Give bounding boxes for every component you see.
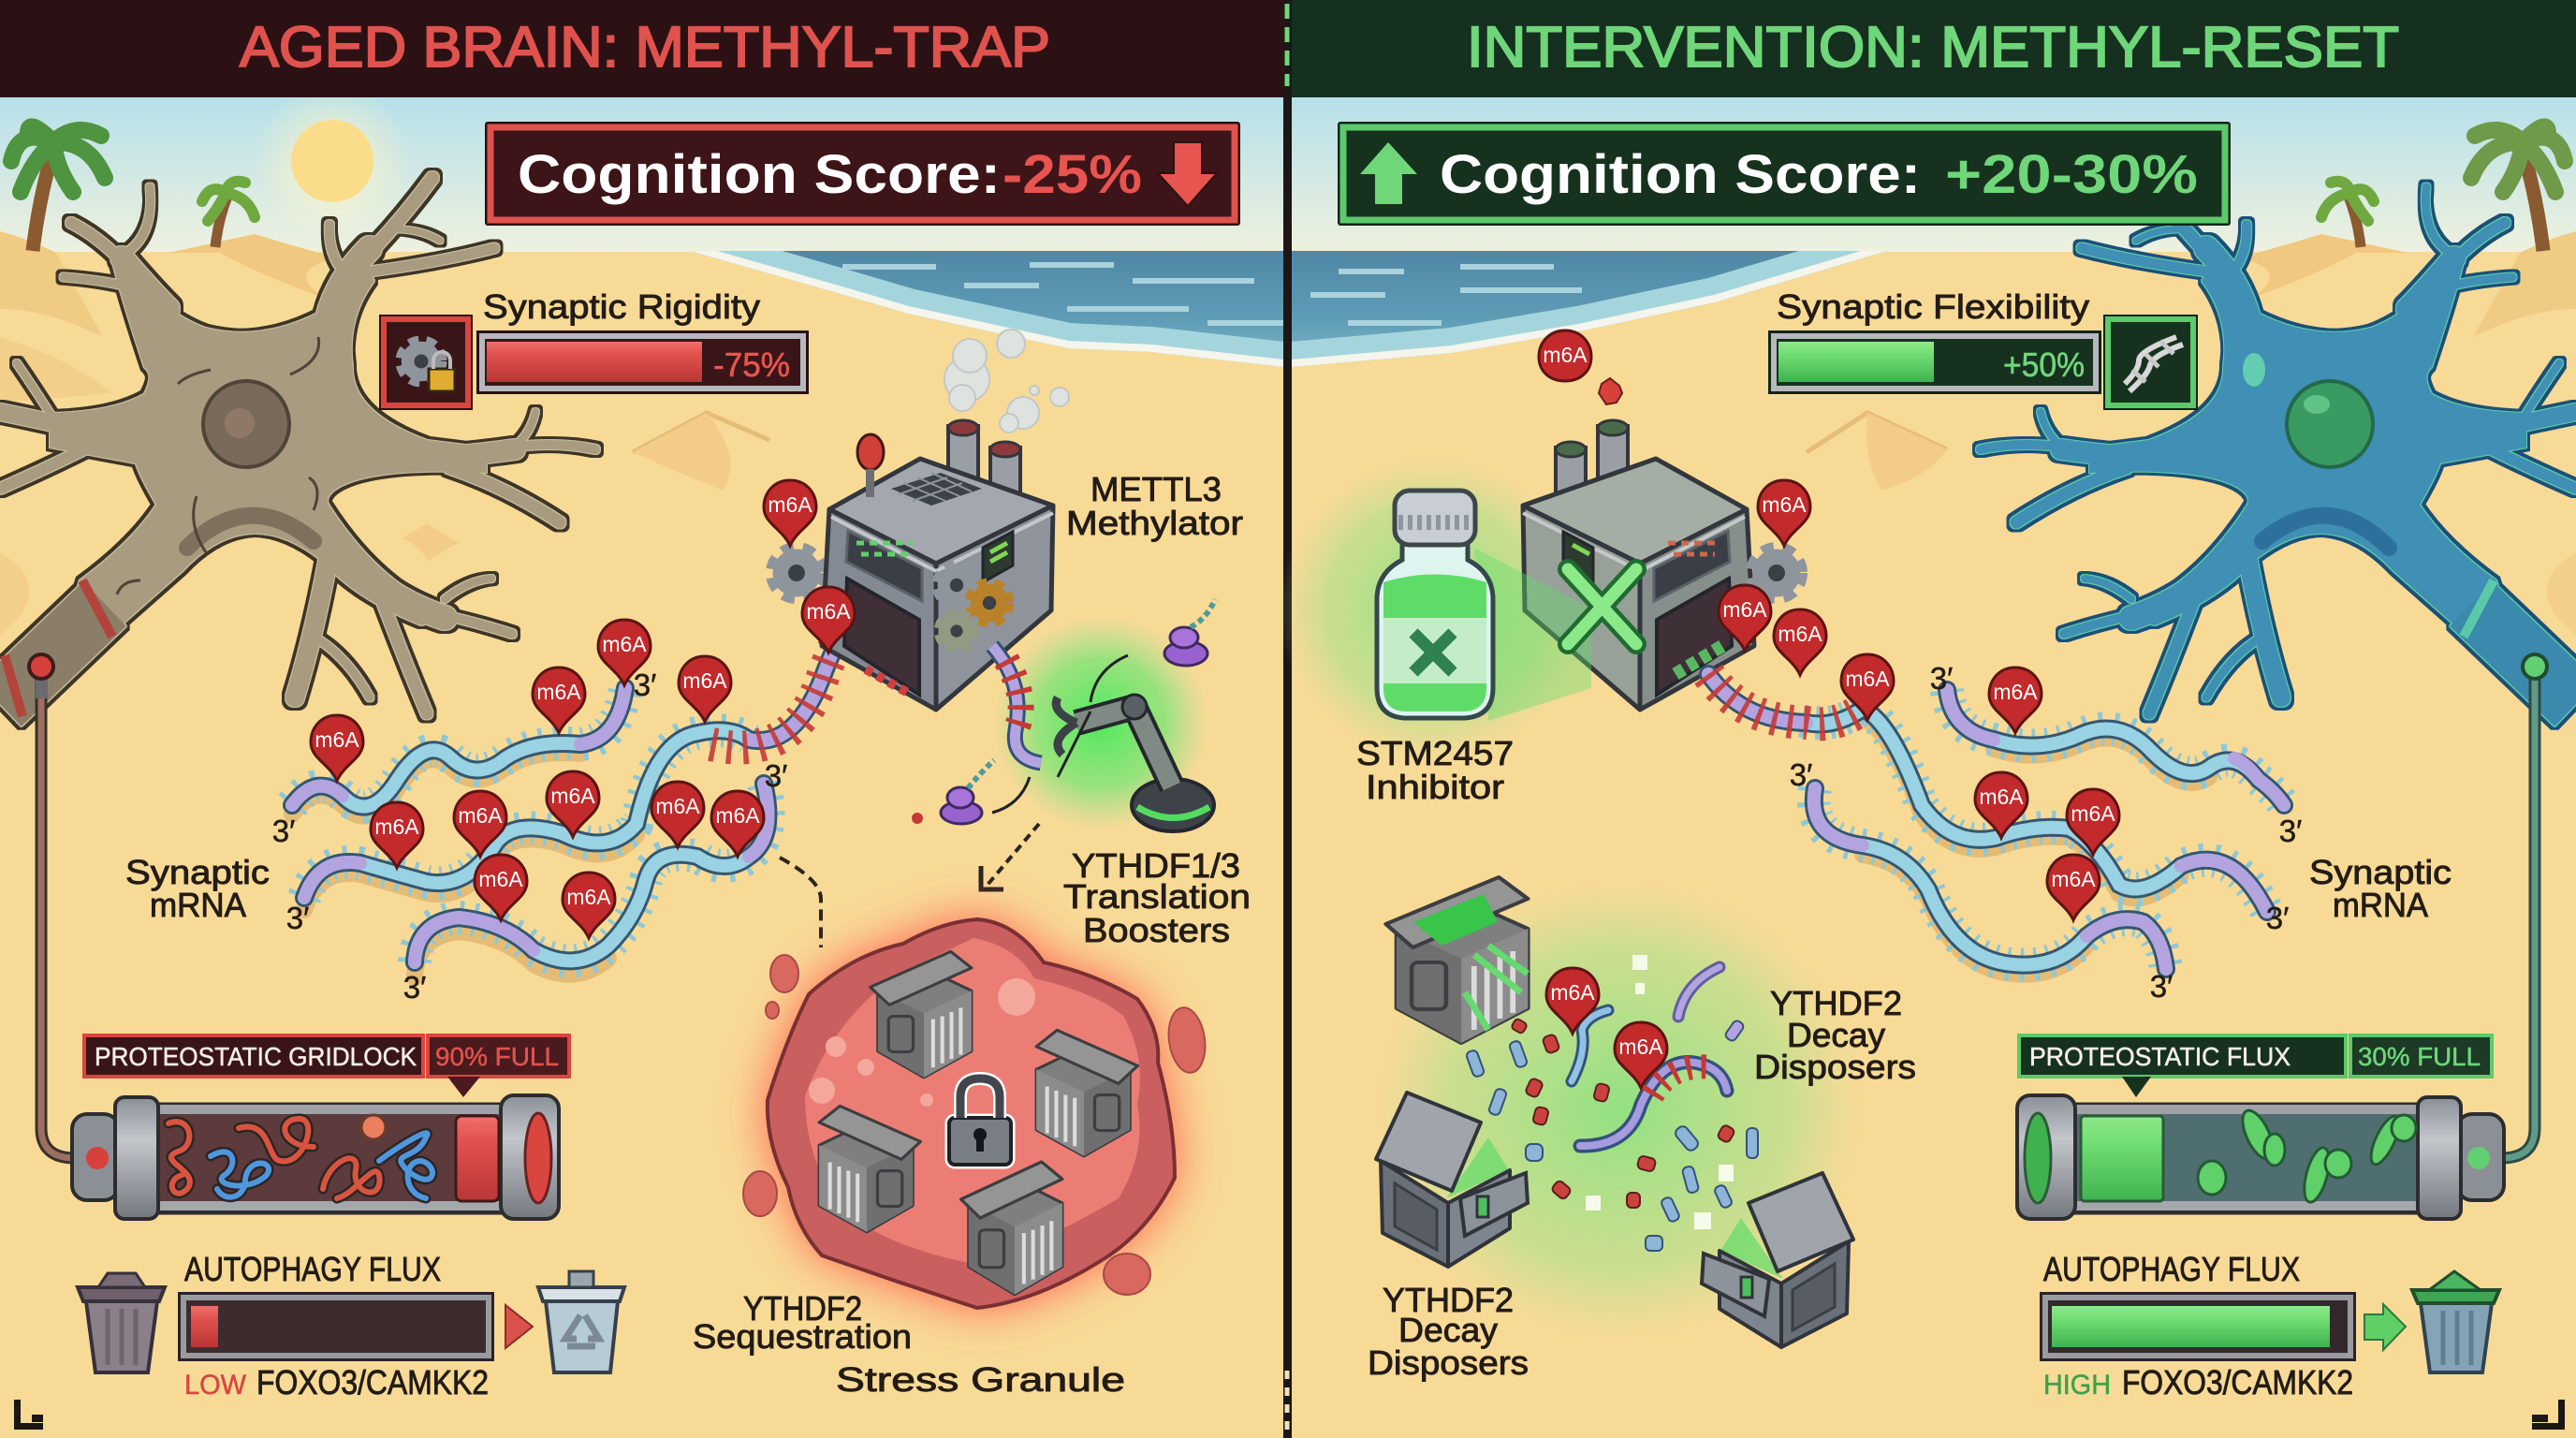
banner: cognition score down (485, 122, 1240, 226)
label: YTHDF1/3 translation boosters: YTHDF1/3 (1072, 846, 1240, 885)
orange ball (361, 1115, 386, 1139)
tube interior (2071, 1109, 2422, 1208)
green glow (993, 615, 1208, 830)
strand shadows (1863, 718, 2209, 975)
shredder: top decay unit (1385, 877, 1528, 1043)
m6A markers: left: m6A (315, 727, 359, 752)
proteostatic flux badge (2019, 1035, 2492, 1097)
status: high: HIGH (2043, 1370, 2111, 1401)
nozzle light (86, 1147, 109, 1169)
3-prime labels: right: 3′ (2266, 901, 2289, 935)
text: 30 percent full: 30% FULL (2358, 1042, 2481, 1071)
protein clumps (2198, 1107, 2416, 1205)
bar frame (1768, 330, 2101, 394)
factory: inhibited METTL3 (1523, 420, 1801, 710)
liquid (1383, 575, 1486, 712)
red pieces (1511, 1018, 1735, 1208)
bar fill (1778, 342, 1934, 382)
wire: axon to left capsule (29, 654, 75, 1158)
tangled aggregates (168, 1119, 432, 1198)
m6A markers: right: m6A (1979, 785, 2024, 809)
status lights (856, 543, 913, 554)
icon: down arrow (1158, 142, 1217, 206)
glass body (1377, 543, 1493, 718)
exit port (525, 1113, 551, 1203)
value: minus 25 percent: -25% (1003, 144, 1142, 205)
icon: active trash bin (2412, 1271, 2499, 1372)
shell (72, 1095, 559, 1219)
red alarm lamp (857, 434, 884, 470)
header: aged brain (0, 0, 1284, 97)
granule body (768, 919, 1175, 1308)
m6A markers: right: m6A (1762, 492, 1807, 517)
value: -75% (713, 345, 790, 384)
label: YTHDF1/3 translation boosters: Boosters (1083, 911, 1230, 949)
left beach scenery (0, 81, 1284, 637)
label: synaptic mRNA left: mRNA (150, 886, 246, 924)
label: YTHDF1/3 translation boosters (1063, 846, 1251, 949)
small arrows (992, 655, 1128, 813)
m6A markers: left: m6A (682, 668, 727, 693)
label: stress granule: Stress Granule (836, 1360, 1125, 1399)
bubbles (809, 978, 1035, 1107)
bar (2040, 1292, 2356, 1361)
m6A markers: left: m6A (458, 803, 503, 828)
neuron: healthy, flexible (1981, 178, 2576, 713)
icon: locked gear (379, 315, 473, 410)
autophagy flux: low (78, 1250, 624, 1401)
text: flux: PROTEOSTATIC FLUX (2029, 1042, 2291, 1071)
icon: palm trees right (2321, 126, 2565, 251)
icon: big inhibition X (1568, 569, 1636, 644)
m6A markers: right: m6A (1722, 597, 1767, 622)
m6A markers: left: m6A (602, 632, 647, 656)
green base panel (1676, 646, 1722, 674)
bar fill (191, 1306, 218, 1347)
label: YTHDF2 sequestration (693, 1289, 912, 1356)
3-prime labels: right: 3′ (1790, 757, 1812, 792)
banner: cognition score up (1338, 122, 2231, 226)
3-prime labels: left (272, 668, 787, 1005)
label: YTHDF2 decay disposers upper (1754, 984, 1916, 1086)
status: low: LOW (184, 1370, 247, 1401)
text: cognition score: Cognition Score: (518, 144, 1001, 205)
text: cognition score: Cognition Score: (1440, 144, 1921, 205)
vent grid (891, 473, 982, 506)
label: YTHDF2 decay disposers lower: Decay (1398, 1311, 1498, 1349)
strand outlines (1708, 674, 2284, 969)
cap (1395, 491, 1475, 545)
m6A markers: left: m6A (550, 784, 595, 808)
label: YTHDF2 decay disposers upper: Disposers (1754, 1048, 1916, 1086)
text: 90 percent full: 90% FULL (435, 1042, 559, 1071)
red piston (456, 1116, 499, 1201)
bar frame (476, 330, 809, 394)
red indicator strip (866, 669, 908, 693)
rna fragments (1572, 967, 1727, 1146)
m6A markers: left: m6A (536, 680, 581, 704)
icon: recycling bin (538, 1271, 624, 1372)
corner mark: bottom right (2532, 1400, 2565, 1430)
red teeth near factory (711, 623, 847, 747)
label: YTHDF1/3 translation boosters: Translation (1063, 877, 1251, 916)
mRNA strands: right (1708, 674, 2284, 975)
decay fragments (1466, 955, 1758, 1251)
label: YTHDF2 sequestration: Sequestration (693, 1317, 912, 1356)
gear left (773, 549, 820, 597)
title: intervention methyl-reset: INTERVENTION: METHYL-RESET (1467, 15, 2399, 79)
gauge: synaptic rigidity (379, 287, 809, 410)
m6A markers: right (1719, 480, 2119, 920)
status: gene names: FOXO3/CAMKK2 (2122, 1363, 2353, 1401)
icon: up arrow (1360, 142, 1417, 204)
label: synaptic mRNA right: mRNA (2333, 886, 2428, 924)
neuron: aged, brittle (0, 178, 595, 713)
ribosome upper (1164, 599, 1215, 666)
m6A markers: left: m6A (655, 794, 700, 818)
header: intervention (1292, 0, 2576, 97)
m6A markers: right: m6A (1778, 622, 1822, 646)
factory body (1523, 420, 1754, 710)
label: STM2457 inhibitor: STM2457 (1356, 734, 1514, 772)
satellite blobs (743, 955, 1209, 1295)
3-prime labels: right: 3′ (1930, 661, 1953, 696)
centre divider (1283, 0, 1292, 1438)
bar fill (2052, 1306, 2330, 1347)
inhibitor glow (1278, 454, 1587, 763)
label: YTHDF2 sequestration: YTHDF2 (743, 1289, 862, 1328)
m6A markers: right: m6A (2051, 867, 2096, 891)
label X (1413, 633, 1453, 672)
bottle: STM2457 (1377, 491, 1493, 718)
decay zone: green glow (1371, 875, 1867, 1343)
strand ribbons (1708, 674, 2284, 969)
label: STM2457 inhibitor (1356, 734, 1514, 806)
inner lighter core (805, 938, 1140, 1264)
m6A markers: left: m6A (768, 492, 812, 517)
autophagy flux: high (2040, 1250, 2499, 1401)
3-prime labels: left: 3′ (634, 668, 656, 702)
tube interior (154, 1109, 505, 1208)
3-prime labels: left: 3′ (286, 901, 309, 935)
robot arm (1056, 695, 1214, 831)
m6A markers: left: m6A (806, 599, 851, 624)
label: METTL3 methylator: Methylator (1066, 504, 1243, 542)
m6A markers: right: m6A (1993, 680, 2038, 704)
value: +50% (2003, 345, 2085, 384)
m6A markers: left: m6A (715, 803, 760, 828)
neuron details: green nucleus and axon ring (2243, 353, 2494, 637)
label: STM2457 inhibitor: Inhibitor (1366, 768, 1504, 806)
decay fragments: m6A (1618, 1034, 1663, 1059)
strand ribbons (292, 616, 854, 962)
shell (2017, 1095, 2504, 1219)
m6A markers: left: m6A (478, 867, 523, 891)
m6A markers: right: m6A (2071, 801, 2115, 826)
right beach scenery (1292, 97, 2576, 637)
m6A ejected above factory (1539, 330, 1622, 404)
status lights (1668, 543, 1720, 554)
label: METTL3 methylator (1066, 470, 1243, 542)
steam from factory (944, 330, 1069, 433)
inhibitor beam (1474, 548, 1591, 721)
capsule: clear proteasome (2017, 1095, 2504, 1219)
label (1383, 618, 1486, 683)
value: plus 20 to 30 percent: +20-30% (1945, 144, 2198, 205)
blue pieces (1466, 1020, 1758, 1251)
sequestered shredders (819, 951, 1137, 1295)
colored gears (938, 566, 975, 604)
gear (1752, 549, 1801, 597)
status: gene names: FOXO3/CAMKK2 (256, 1363, 489, 1401)
m6A on fragments: m6A (1550, 980, 1595, 1005)
m6A markers: right: m6A (1845, 667, 1890, 691)
text: gridlock: PROTEOSTATIC GRIDLOCK (95, 1042, 417, 1071)
label: YTHDF2 decay disposers lower: Disposers (1368, 1343, 1529, 1382)
label: YTHDF2 decay disposers upper: Decay (1787, 1016, 1885, 1054)
m6A markers: left: m6A (566, 885, 611, 909)
label: YTHDF2 decay disposers upper: YTHDF2 (1770, 984, 1902, 1022)
ribosome lower (912, 760, 994, 824)
3-prime labels: left: 3′ (272, 814, 295, 848)
bar fill (487, 342, 702, 382)
proteostatic gridlock badge (84, 1035, 569, 1097)
label: YTHDF2 decay disposers lower (1368, 1281, 1529, 1382)
gauge: synaptic flexibility (1768, 287, 2198, 410)
label: METTL3 methylator: METTL3 (1090, 470, 1222, 508)
mRNA strands: left (292, 616, 854, 977)
strand from factory (992, 646, 1041, 763)
arrow (505, 1305, 533, 1348)
label: synaptic mRNA left (125, 853, 270, 924)
translation boosters: glow, robot arm, ribosomes (912, 599, 1215, 831)
title: aged brain methyl-trap: AGED BRAIN: METHYL-TRAP (240, 15, 1050, 79)
label: AUTOPHAGY FLUX (184, 1250, 441, 1288)
arrow (2364, 1304, 2406, 1350)
strand shadows (292, 753, 637, 977)
strand outlines (292, 616, 854, 962)
icon: dna helix (2103, 315, 2198, 410)
m6A on fragments (1546, 968, 1599, 1034)
m6A markers: left: m6A (374, 814, 419, 839)
label: YTHDF2 decay disposers lower: YTHDF2 (1383, 1281, 1514, 1319)
label: synaptic mRNA left: Synaptic (125, 853, 270, 891)
corner mark: bottom left (14, 1400, 43, 1430)
strand teeth (1802, 690, 2284, 969)
green piston (2081, 1116, 2163, 1201)
strand lavender ends (292, 616, 854, 962)
dashed line: sequestration path (780, 858, 821, 947)
icon: palm trees left (11, 126, 255, 251)
green contents (1413, 894, 1498, 946)
label: synaptic mRNA right (2309, 853, 2452, 924)
red glow (768, 919, 1175, 1308)
bin: lower right decay unit (1702, 1173, 1853, 1347)
3-prime labels: right: 3′ (2150, 969, 2173, 1004)
capsule: clogged proteasome (72, 1095, 559, 1219)
label: Synaptic Rigidity (483, 287, 760, 326)
wire: axon to right capsule (2501, 654, 2547, 1158)
white sparks (1586, 955, 1734, 1229)
label: AUTOPHAGY FLUX (2043, 1250, 2300, 1288)
stress granule (743, 919, 1209, 1308)
3-prime labels: left: 3′ (403, 970, 426, 1005)
bin: lower left decay unit (1376, 1093, 1528, 1267)
icon: padlock (949, 1078, 1011, 1165)
factory: METTL3 methylator (773, 420, 1053, 710)
label: Synaptic Flexibility (1777, 287, 2089, 326)
small fragment (1599, 378, 1622, 404)
m6A ejected above factory: m6A (1543, 343, 1588, 367)
3-prime labels: left: 3′ (765, 758, 787, 793)
neuron details: nucleus, cracks and axon rings (5, 337, 319, 716)
icon: dull trash bin (78, 1273, 165, 1372)
red teeth near factory (1708, 674, 1863, 724)
3-prime labels: right: 3′ (2279, 814, 2302, 848)
nozzle light (2467, 1147, 2490, 1169)
strand teeth (292, 688, 768, 962)
3-prime labels: right (1790, 661, 2302, 1004)
m6A markers: left (311, 480, 855, 938)
strand lavender ends (1708, 674, 2284, 969)
bar (178, 1292, 494, 1361)
entry port (2025, 1113, 2051, 1203)
label: synaptic mRNA right: Synaptic (2309, 853, 2452, 891)
dashed arrow to stress granule (981, 824, 1039, 889)
